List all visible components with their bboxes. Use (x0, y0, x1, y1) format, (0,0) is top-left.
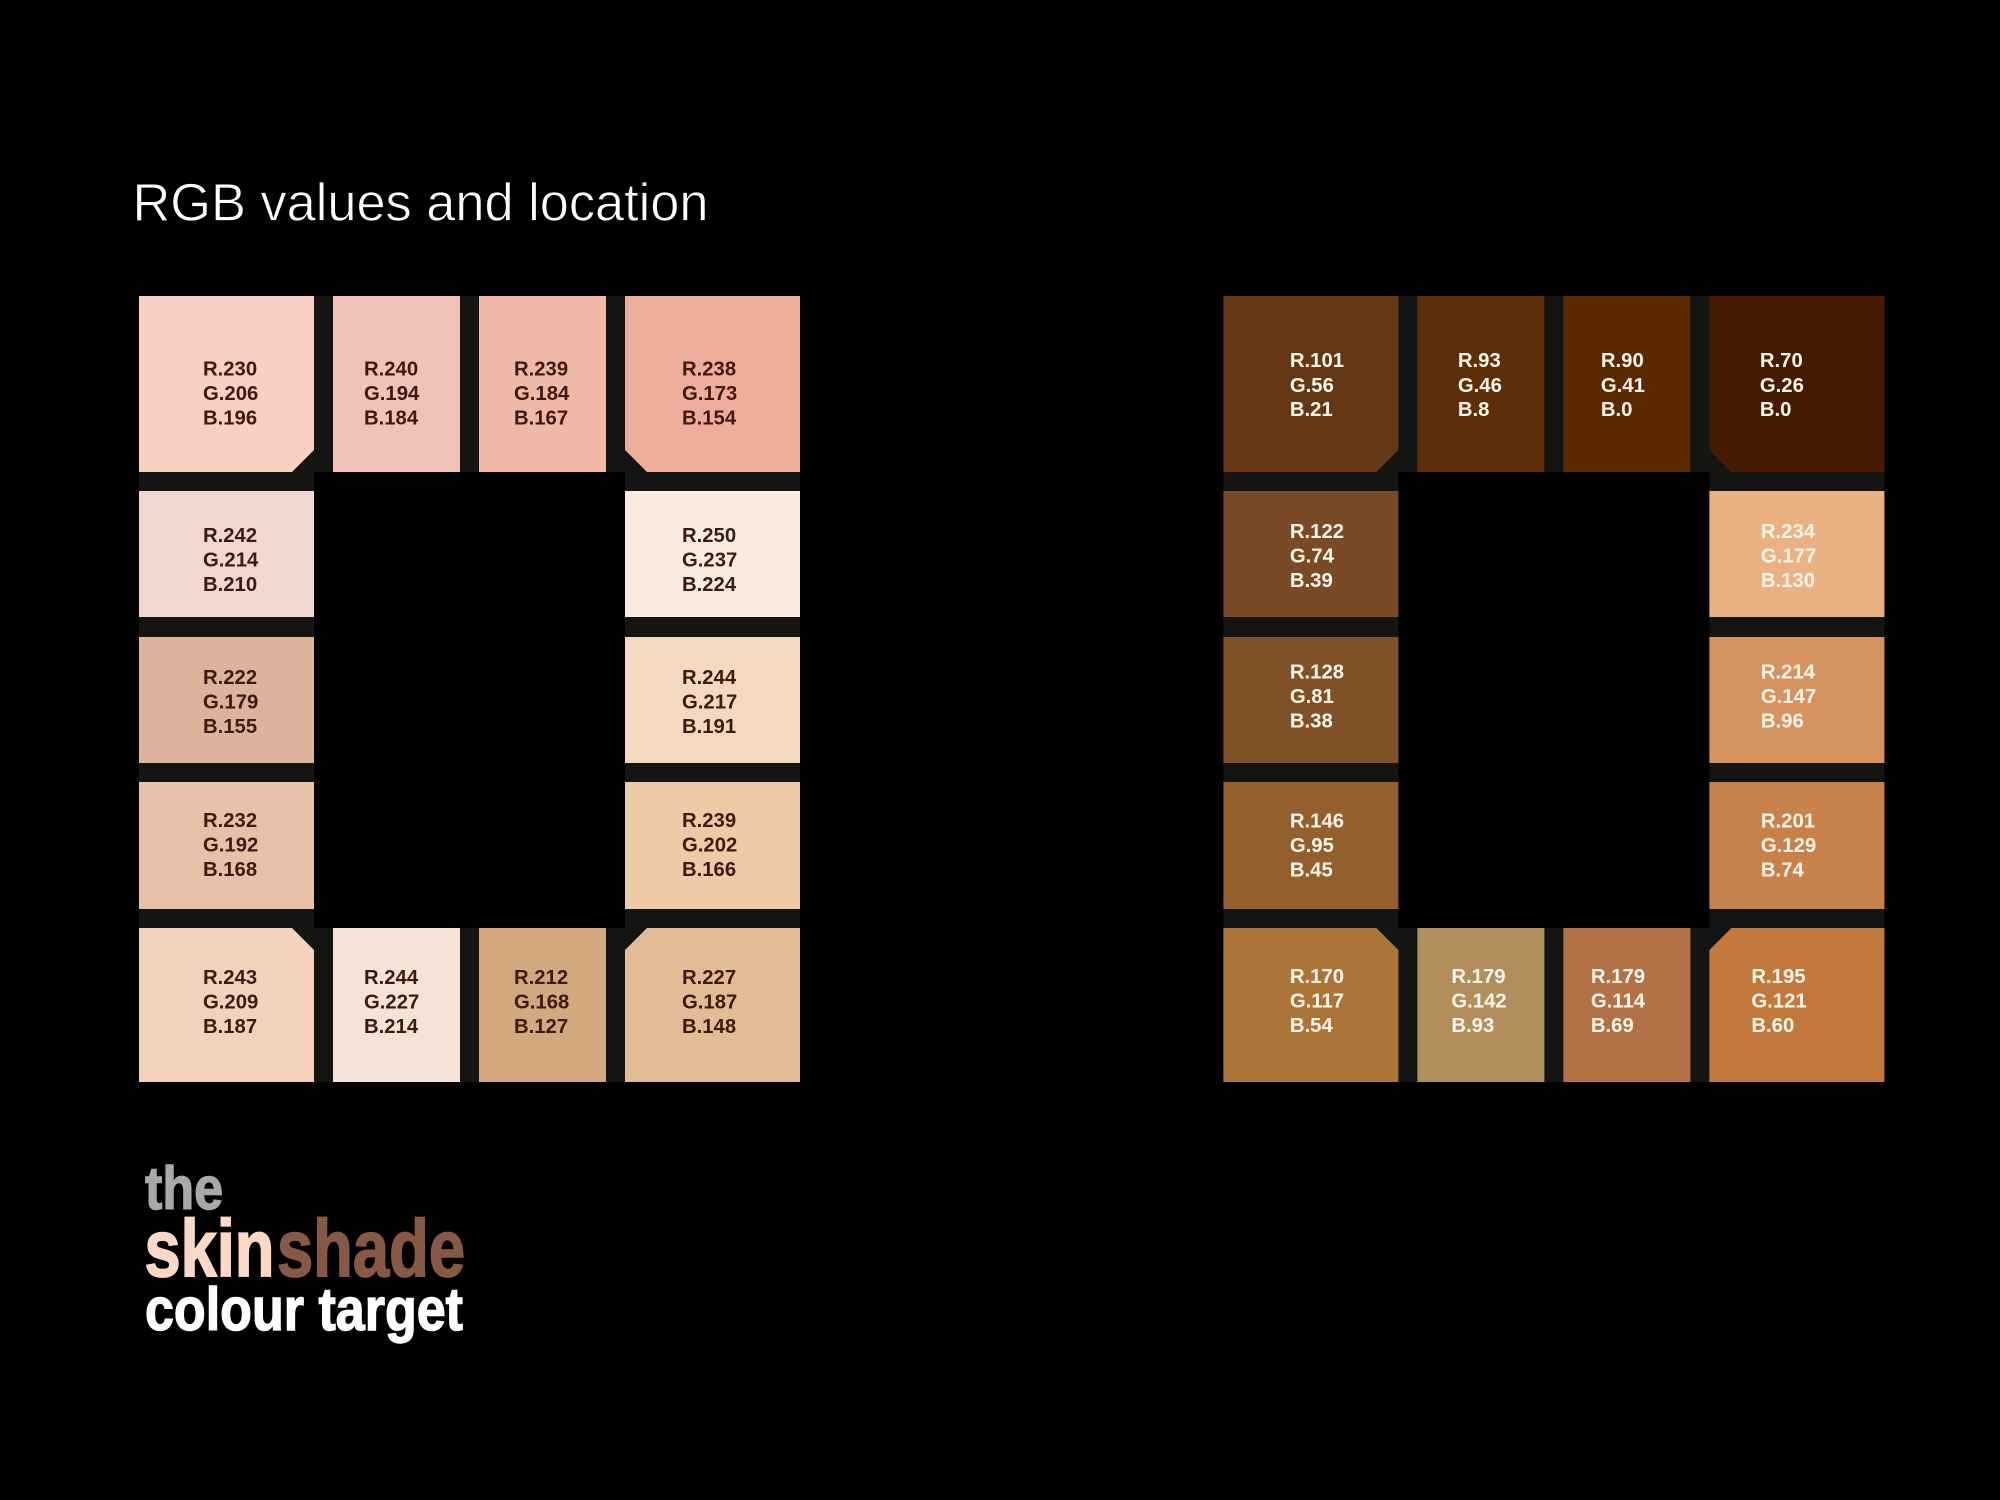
swatch: R.93 G.46 B.8: B.8 (1458, 399, 1489, 421)
swatch: R.214 G.147 B.96: B.96 (1761, 710, 1804, 732)
swatch: R.239 G.184 B.167: B.167 (514, 407, 568, 429)
swatch: R.128 G.81 B.38: R.128 (1290, 661, 1344, 683)
swatch: R.232 G.192 B.168: R.232 (203, 810, 257, 832)
swatch: R.70 G.26 B.0 (1709, 296, 1884, 472)
swatch: R.101 G.56 B.21 (1223, 296, 1398, 472)
swatch: R.222 G.179 B.155: B.155 (203, 716, 257, 738)
swatch: R.170 G.117 B.54: G.117 (1290, 991, 1344, 1013)
swatch: R.212 G.168 B.127: G.168 (514, 992, 569, 1014)
logo: the skinshade colour target (144, 1155, 465, 1343)
swatch: R.230 G.206 B.196: R.230 (203, 358, 257, 380)
swatch: R.222 G.179 B.155: G.179 (203, 692, 258, 714)
swatch: R.238 G.173 B.154: G.173 (682, 383, 737, 405)
swatch: R.227 G.187 B.148: G.187 (682, 992, 737, 1014)
swatch: R.70 G.26 B.0: G.26 (1760, 375, 1804, 397)
swatch: R.146 G.95 B.45: R.146 (1290, 810, 1344, 832)
swatch: R.90 G.41 B.0: B.0 (1601, 399, 1632, 421)
swatch: R.243 G.209 B.187: R.243 (203, 967, 257, 989)
swatch: R.243 G.209 B.187: G.209 (203, 992, 258, 1014)
logo: the skinshade colour target: colour target (145, 1276, 463, 1343)
swatch: R.214 G.147 B.96 (1709, 637, 1884, 763)
swatch: R.234 G.177 B.130: B.130 (1761, 570, 1815, 592)
swatch: R.195 G.121 B.60 (1709, 928, 1884, 1082)
swatch: R.128 G.81 B.38: G.81 (1290, 686, 1334, 708)
swatch: R.240 G.194 B.184: R.240 (364, 358, 418, 380)
swatch: R.238 G.173 B.154 (625, 296, 800, 472)
swatch: R.170 G.117 B.54: B.54 (1290, 1015, 1333, 1037)
swatch: R.146 G.95 B.45: G.95 (1290, 835, 1334, 857)
swatch: R.239 G.202 B.166: G.202 (682, 835, 737, 857)
swatch: R.227 G.187 B.148: B.148 (682, 1016, 736, 1038)
swatch: R.239 G.202 B.166: B.166 (682, 859, 736, 881)
swatch: R.90 G.41 B.0 (1563, 296, 1690, 472)
swatch: R.195 G.121 B.60: B.60 (1751, 1015, 1794, 1037)
swatch: R.234 G.177 B.130: G.177 (1761, 546, 1816, 568)
swatch: R.179 G.142 B.93: B.93 (1451, 1015, 1494, 1037)
swatch: R.70 G.26 B.0: R.70 (1760, 350, 1803, 372)
swatch: R.250 G.237 B.224: B.224 (682, 574, 737, 596)
swatch: R.222 G.179 B.155: R.222 (203, 667, 257, 689)
swatch: R.244 G.227 B.214 (333, 928, 460, 1082)
title: RGB values and location (132, 174, 708, 232)
swatch: R.239 G.184 B.167: G.184 (514, 383, 570, 405)
swatch: R.170 G.117 B.54 (1223, 928, 1398, 1082)
swatch: R.179 G.114 B.69: G.114 (1591, 991, 1646, 1013)
swatch: R.179 G.114 B.69: B.69 (1591, 1015, 1634, 1037)
swatch: R.90 G.41 B.0: G.41 (1601, 375, 1645, 397)
swatch: R.101 G.56 B.21: G.56 (1290, 375, 1334, 397)
swatch: R.201 G.129 B.74: B.74 (1761, 859, 1804, 881)
swatch: R.93 G.46 B.8: G.46 (1458, 375, 1502, 397)
swatch: R.70 G.26 B.0: B.0 (1760, 399, 1791, 421)
swatch: R.230 G.206 B.196: B.196 (203, 407, 257, 429)
swatch: R.234 G.177 B.130 (1709, 491, 1884, 617)
swatch: R.179 G.142 B.93: R.179 (1451, 966, 1506, 988)
swatch: R.201 G.129 B.74 (1709, 782, 1884, 909)
swatch: R.212 G.168 B.127 (479, 928, 606, 1082)
logo: the skinshade colour target: shade (277, 1204, 465, 1294)
swatch: R.238 G.173 B.154: B.154 (682, 407, 737, 429)
swatch: R.239 G.202 B.166 (625, 782, 800, 909)
swatch: R.179 G.142 B.93: G.142 (1451, 991, 1507, 1013)
swatch: R.122 G.74 B.39 (1223, 491, 1398, 617)
swatch: R.242 G.214 B.210: G.214 (203, 550, 259, 572)
swatch: R.244 G.217 B.191: B.191 (682, 716, 736, 738)
swatch: R.170 G.117 B.54: R.170 (1290, 966, 1344, 988)
swatch: R.212 G.168 B.127: B.127 (514, 1016, 568, 1038)
swatch: R.243 G.209 B.187: B.187 (203, 1016, 257, 1038)
swatch: R.244 G.227 B.214: R.244 (364, 967, 419, 989)
swatch: R.214 G.147 B.96: G.147 (1761, 686, 1816, 708)
swatch: R.244 G.217 B.191: R.244 (682, 667, 737, 689)
swatch: R.93 G.46 B.8 (1417, 296, 1544, 472)
swatch: R.212 G.168 B.127: R.212 (514, 967, 568, 989)
panel: light skin tones target (139, 296, 800, 1082)
swatch: R.239 G.202 B.166: R.239 (682, 810, 736, 832)
swatch: R.201 G.129 B.74: R.201 (1761, 810, 1815, 832)
swatch: R.242 G.214 B.210: R.242 (203, 525, 257, 547)
swatch: R.239 G.184 B.167: R.239 (514, 358, 568, 380)
swatch: R.128 G.81 B.38: B.38 (1290, 710, 1333, 732)
swatch: R.222 G.179 B.155 (139, 637, 314, 763)
swatch: R.230 G.206 B.196 (139, 296, 314, 472)
swatch: R.179 G.114 B.69 (1563, 928, 1690, 1082)
swatch: R.128 G.81 B.38 (1223, 637, 1398, 763)
swatch: R.234 G.177 B.130: R.234 (1761, 521, 1816, 543)
swatch: R.201 G.129 B.74: G.129 (1761, 835, 1816, 857)
swatch: R.195 G.121 B.60: R.195 (1751, 966, 1806, 988)
swatch: R.239 G.184 B.167 (479, 296, 606, 472)
swatch: R.244 G.217 B.191 (625, 637, 800, 763)
swatch: R.250 G.237 B.224 (625, 491, 800, 617)
panel: dark skin tones target (1223, 296, 1884, 1082)
swatch: R.195 G.121 B.60: G.121 (1751, 991, 1807, 1013)
swatch: R.244 G.227 B.214: B.214 (364, 1016, 419, 1038)
swatch: R.240 G.194 B.184: G.194 (364, 383, 420, 405)
swatch: R.240 G.194 B.184 (333, 296, 460, 472)
swatch: R.214 G.147 B.96: R.214 (1761, 661, 1816, 683)
swatch: R.240 G.194 B.184: B.184 (364, 407, 419, 429)
swatch: R.179 G.114 B.69: R.179 (1591, 966, 1645, 988)
swatch: R.122 G.74 B.39: R.122 (1290, 521, 1344, 543)
logo: the skinshade colour target: skin (144, 1204, 274, 1294)
swatch: R.250 G.237 B.224: R.250 (682, 525, 736, 547)
swatch: R.122 G.74 B.39: G.74 (1290, 546, 1335, 568)
swatch: R.101 G.56 B.21: R.101 (1290, 350, 1344, 372)
swatch: R.244 G.217 B.191: G.217 (682, 692, 737, 714)
swatch: R.232 G.192 B.168: B.168 (203, 859, 257, 881)
swatch: R.101 G.56 B.21: B.21 (1290, 399, 1333, 421)
swatch: R.122 G.74 B.39: B.39 (1290, 570, 1333, 592)
swatch: R.93 G.46 B.8: R.93 (1458, 350, 1501, 372)
swatch: R.232 G.192 B.168 (139, 782, 314, 909)
swatch: R.244 G.227 B.214: G.227 (364, 992, 419, 1014)
swatch: R.232 G.192 B.168: G.192 (203, 835, 258, 857)
swatch: R.250 G.237 B.224: G.237 (682, 550, 737, 572)
swatch: R.146 G.95 B.45: B.45 (1290, 859, 1333, 881)
logo: the skinshade colour target: the (145, 1155, 223, 1222)
swatch: R.238 G.173 B.154: R.238 (682, 358, 736, 380)
swatch: R.242 G.214 B.210: B.210 (203, 574, 257, 596)
swatch: R.243 G.209 B.187 (139, 928, 314, 1082)
swatch: R.179 G.142 B.93 (1417, 928, 1544, 1082)
swatch: R.90 G.41 B.0: R.90 (1601, 350, 1644, 372)
swatch: R.146 G.95 B.45 (1223, 782, 1398, 909)
swatch: R.227 G.187 B.148: R.227 (682, 967, 736, 989)
swatch: R.230 G.206 B.196: G.206 (203, 383, 258, 405)
swatch: R.227 G.187 B.148 (625, 928, 800, 1082)
swatch: R.242 G.214 B.210 (139, 491, 314, 617)
